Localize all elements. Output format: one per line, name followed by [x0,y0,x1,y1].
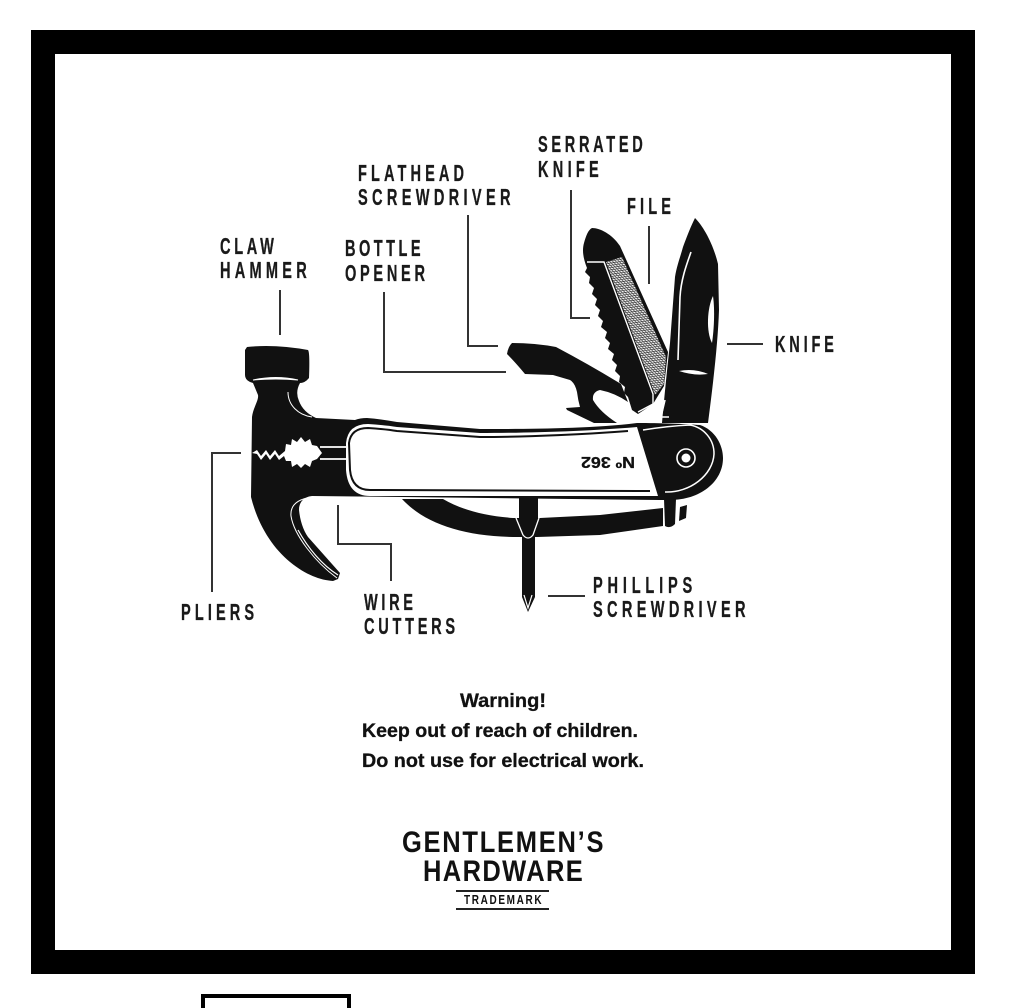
tool: phillips screwdriver [516,498,539,612]
illustration: multi-tool [245,218,723,612]
label: bottle opener: BOTTLE [345,236,421,262]
label: wire cutters: CUTTERS [364,614,455,640]
label: claw hammer: HAMMER [220,258,307,284]
label: claw hammer: CLAW [220,234,274,260]
brand logo: HARDWARE [423,854,583,887]
label: wire cutters: WIRE [364,590,413,616]
handle white stripe [346,424,658,496]
handle inner panel [349,428,652,492]
label: file: FILE [627,194,671,220]
label: pliers: PLIERS [181,600,254,626]
brand logo [402,825,603,910]
label: pliers [181,453,254,626]
label: phillips screwdriver: PHILLIPS [593,573,692,599]
tool: claw hammer body and handle [245,346,723,581]
label: phillips screwdriver: SCREWDRIVER [593,597,746,623]
warning text [362,691,644,772]
tool: knife blade [661,218,719,423]
label: serrated knife: KNIFE [538,157,599,183]
label: flathead screwdriver: SCREWDRIVER [358,185,511,211]
label: serrated knife: SERRATED [538,132,643,158]
warning text: Warning! [460,691,546,712]
label: wire cutters [338,505,455,640]
warning text: Do not use for electrical work. [362,751,644,772]
icon: pivot screw [677,449,695,467]
label: file [627,194,671,284]
handle pliers detail [252,437,322,468]
handle pivot highlight [643,425,714,492]
label: phillips screwdriver [548,573,746,623]
label: flathead screwdriver [358,161,511,346]
partial box below frame [203,996,349,1008]
engraved number: Nº 362 [581,453,635,470]
label: claw hammer [220,234,307,335]
tool: flathead screwdriver and bottle opener [507,343,628,423]
label: knife [727,332,834,358]
brand logo: TRADEMARK [464,894,542,907]
label: serrated knife [538,132,643,318]
label: bottle opener [345,236,506,372]
warning text: Keep out of reach of children. [362,721,638,742]
tool: lower ring and post [402,499,687,537]
label: flathead screwdriver: FLATHEAD [358,161,464,187]
label: bottle opener: OPENER [345,261,425,287]
label: knife: KNIFE [775,332,834,358]
tool: serrated knife and file [583,228,668,414]
brand logo: GENTLEMEN’S [402,825,603,858]
